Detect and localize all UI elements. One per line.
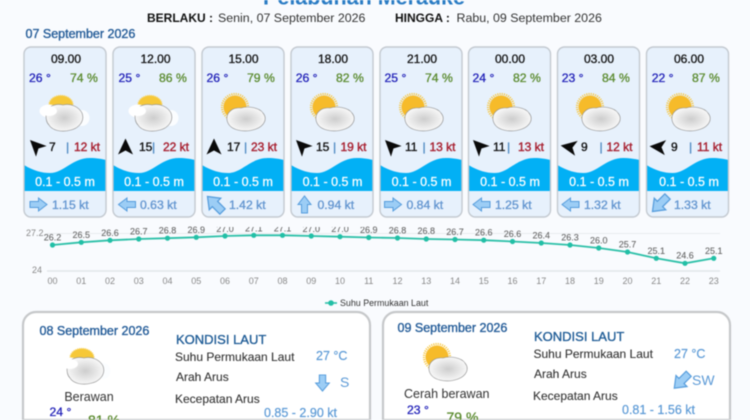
icon: partly cloudy <box>488 94 531 131</box>
forecast card 12.00: 0.63 kt <box>140 198 177 212</box>
sea conditions block: KONDISI LAUT <box>176 332 266 347</box>
forecast card 12.00: 25 ° <box>118 71 140 85</box>
forecast card 09.00 <box>24 47 106 217</box>
x axis labels: 05 <box>191 276 201 286</box>
panel: 08 September forecast: Berawan <box>64 390 114 404</box>
data labels: 26.7 <box>446 227 464 237</box>
forecast card 09.00: 26 ° <box>29 71 51 85</box>
x axis labels: 07 <box>249 276 259 286</box>
forecast card 00.00: 24 ° <box>472 71 494 85</box>
forecast card 18.00: 19 kt <box>340 140 367 154</box>
x axis labels: 02 <box>105 276 115 286</box>
forecast card 03.00: 12 kt <box>606 140 633 154</box>
x axis labels: 10 <box>335 276 345 286</box>
forecast card 21.00: 25 ° <box>384 71 406 85</box>
forecast card 09.00: | <box>66 140 69 154</box>
sea conditions block: 0.81 - 1.56 kt <box>622 403 695 417</box>
y axis labels: 24 <box>32 265 42 275</box>
forecast card 09.00: 74 % <box>70 71 98 85</box>
icon: cloudy <box>60 348 110 384</box>
forecast card 09.00: 0.1 - 0.5 m <box>35 175 95 189</box>
data labels: 27.1 <box>245 224 263 234</box>
icon: wind arrow <box>118 138 133 154</box>
x axis labels: 23 <box>709 276 719 286</box>
data labels: 27.0 <box>216 224 234 234</box>
forecast card 06.00: 0.1 - 0.5 m <box>659 175 719 189</box>
x axis labels: 06 <box>220 276 230 286</box>
x axis labels <box>47 276 719 286</box>
forecast card 03.00: 23 ° <box>562 71 584 85</box>
data labels: 25.1 <box>705 246 723 256</box>
sea conditions block: Arah Arus <box>176 370 229 384</box>
x axis labels: 17 <box>536 276 546 286</box>
x axis labels: 08 <box>277 276 288 286</box>
icon: partly cloudy <box>577 94 620 131</box>
x axis labels: 14 <box>450 276 460 286</box>
forecast card 06.00: | <box>689 140 692 154</box>
sea conditions block <box>533 329 715 417</box>
sea conditions block: Suhu Permukaan Laut <box>534 347 654 361</box>
forecast card 18.00: 0.94 kt <box>318 198 355 212</box>
icon: wind arrow <box>649 139 666 155</box>
icon: wind arrow <box>25 135 47 157</box>
forecast card 15.00 <box>202 47 284 217</box>
validity period header: HINGGA : <box>395 11 450 25</box>
data labels: 26.9 <box>187 225 205 235</box>
x axis labels: 03 <box>134 276 144 286</box>
forecast card 12.00: | <box>152 140 155 154</box>
x axis labels: 01 <box>76 276 86 286</box>
x axis labels: 20 <box>622 276 633 286</box>
sea conditions block: 27 °C <box>674 347 705 361</box>
forecast card 00.00: | <box>507 140 510 154</box>
sea conditions block: 0.85 - 2.90 kt <box>264 406 337 420</box>
x axis labels: 13 <box>421 276 431 286</box>
data labels: 26.2 <box>44 232 61 242</box>
icon: wind arrow <box>559 138 578 156</box>
forecast card 18.00: 15 <box>316 140 330 154</box>
forecast card 03.00: 0.1 - 0.5 m <box>569 175 629 189</box>
forecast card 06.00: 87 % <box>692 71 720 85</box>
forecast card 00.00: 00.00 <box>495 52 525 66</box>
icon: partly cloudy <box>424 344 467 381</box>
sea conditions block <box>175 332 349 420</box>
forecast card 03.00 <box>558 47 640 217</box>
forecast card 00.00: 13 kt <box>518 140 545 154</box>
forecast card 00.00: 11 <box>493 140 506 154</box>
icon: partly cloudy <box>667 94 710 131</box>
forecast card 15.00: 79 % <box>247 71 275 85</box>
forecast card 18.00 <box>291 47 373 217</box>
x axis labels: 21 <box>651 276 661 286</box>
sea conditions block: Kecepatan Arus <box>533 389 618 403</box>
sea conditions block: Suhu Permukaan Laut <box>175 350 295 364</box>
x axis labels: 11 <box>364 276 373 286</box>
forecast card 06.00: 11 kt <box>697 140 723 154</box>
temperature line <box>52 235 714 263</box>
data labels: 26.6 <box>475 228 493 238</box>
forecast card 15.00: 0.1 - 0.5 m <box>213 175 273 189</box>
x axis labels: 04 <box>162 276 173 286</box>
data labels: 25.7 <box>619 240 636 250</box>
x axis labels: 22 <box>680 276 690 286</box>
icon: current arrow south <box>316 375 329 391</box>
forecast card 00.00 <box>468 47 550 217</box>
forecast card 12.00: 22 kt <box>163 140 190 154</box>
y axis labels <box>26 228 44 275</box>
forecast card 21.00: 11 <box>405 140 418 154</box>
panel: 09 September forecast <box>383 312 730 420</box>
sea conditions block: 27 °C <box>316 349 347 363</box>
icon: current arrow <box>118 198 136 211</box>
forecast card 09.00: 09.00 <box>51 52 81 66</box>
icon: current arrow south-west <box>669 368 694 394</box>
panel: 08 September forecast <box>23 312 370 420</box>
icon: wind arrow <box>206 138 222 154</box>
data labels: 26.0 <box>590 236 608 246</box>
data labels: 26.9 <box>360 225 378 235</box>
data labels: 26.6 <box>504 229 521 239</box>
panel: 08 September forecast: 24 ° <box>50 405 71 419</box>
icon: wind arrow <box>291 135 313 157</box>
icon: current arrow <box>473 198 490 211</box>
forecast card 21.00: 21.00 <box>407 52 437 66</box>
forecast card 18.00: 0.1 - 0.5 m <box>303 175 362 189</box>
forecast card 18.00: 26 ° <box>296 71 318 85</box>
forecast card 21.00: | <box>422 140 426 154</box>
icon: partly cloudy <box>311 94 354 131</box>
icon: current arrow <box>298 196 311 213</box>
icon: partly cloudy <box>222 94 265 131</box>
validity period header: Rabu, 09 September 2026 <box>456 11 602 25</box>
data labels: 25.1 <box>647 246 665 256</box>
forecast card 15.00: 23 kt <box>251 140 278 154</box>
forecast card 15.00: 17 <box>227 140 241 154</box>
sea conditions block: S <box>340 374 349 390</box>
forecast card 21.00 <box>380 47 462 217</box>
x axis labels: 18 <box>565 276 575 286</box>
icon: wind arrow <box>380 135 402 157</box>
forecast card 03.00: 1.32 kt <box>584 198 621 212</box>
forecast card 03.00: 03.00 <box>584 52 614 66</box>
data labels <box>44 224 723 260</box>
icon: current arrow <box>647 191 673 217</box>
forecast card 03.00: 9 <box>581 140 588 154</box>
forecast card 06.00: 1.33 kt <box>674 198 711 212</box>
forecast card 21.00: 74 % <box>425 71 453 85</box>
line chart: sea surface temperature <box>26 219 723 308</box>
date heading: 07 September 2026 <box>26 27 135 41</box>
icon: current arrow <box>30 198 47 211</box>
data labels: 27.0 <box>331 224 349 234</box>
sea conditions block: Kecepatan Arus <box>175 392 260 406</box>
forecast card 00.00: 1.25 kt <box>495 198 532 212</box>
mask clipping the tops of the chart labels <box>215 219 365 227</box>
x axis labels: 16 <box>507 276 518 286</box>
forecast card 21.00: 13 kt <box>430 140 456 154</box>
validity period header: BERLAKU : <box>147 11 213 25</box>
panel: 09 September forecast: 23 ° <box>407 403 429 417</box>
icon: partly cloudy <box>400 94 443 131</box>
data labels: 24.6 <box>676 250 694 260</box>
x axis labels: 09 <box>306 276 316 286</box>
forecast card 00.00: 0.1 - 0.5 m <box>480 175 540 189</box>
legend: Suhu Permukaan Laut <box>340 298 429 308</box>
forecast card 06.00 <box>646 47 728 217</box>
forecast card 15.00: | <box>244 140 247 154</box>
forecast card 00.00: 82 % <box>513 71 541 85</box>
panel: 08 September forecast: 08 September 2026 <box>40 324 149 338</box>
x axis labels: 19 <box>594 276 604 286</box>
data labels: 26.8 <box>159 226 176 236</box>
data labels: 26.4 <box>532 230 550 240</box>
sea conditions block: KONDISI LAUT <box>534 329 624 344</box>
forecast card 06.00: 06.00 <box>674 52 704 66</box>
icon: current arrow <box>562 198 579 211</box>
data labels: 26.3 <box>561 232 579 242</box>
icon: cloudy <box>40 96 90 131</box>
y axis labels: 27.2 <box>26 228 44 238</box>
forecast card 12.00: 0.1 - 0.5 m <box>124 175 184 189</box>
validity period header: Senin, 07 September 2026 <box>218 11 366 25</box>
forecast card 03.00: | <box>600 140 603 154</box>
icon: cloudy <box>128 96 178 131</box>
forecast card 21.00: 0.1 - 0.5 m <box>392 175 451 189</box>
data labels: 26.6 <box>101 228 119 238</box>
icon: wind arrow <box>468 135 490 157</box>
data labels: 26.5 <box>72 230 90 240</box>
panel: 09 September forecast: 09 September 2026 <box>398 321 507 335</box>
x axis labels: 15 <box>479 276 489 286</box>
forecast card 15.00: 1.42 kt <box>229 198 266 212</box>
forecast card 06.00: 22 ° <box>652 71 674 85</box>
data labels: 27.1 <box>274 224 291 234</box>
icon: current arrow <box>202 191 228 217</box>
forecast card 12.00: 15 <box>139 140 153 154</box>
icon: current arrow <box>384 198 402 211</box>
forecast card 09.00: 1.15 kt <box>52 198 89 212</box>
sea conditions block: SW <box>692 372 715 388</box>
data labels: 26.8 <box>417 226 435 236</box>
forecast card 12.00 <box>113 47 195 217</box>
forecast card 09.00: 7 <box>49 140 56 154</box>
forecast card 15.00: 15.00 <box>228 52 259 66</box>
forecast card 09.00: 12 kt <box>74 140 101 154</box>
data labels: 26.7 <box>130 226 148 236</box>
forecast card 03.00: 84 % <box>602 71 630 85</box>
forecast card 18.00: 18.00 <box>318 52 348 66</box>
panel: 09 September forecast: Cerah berawan <box>404 387 490 401</box>
forecast card 06.00: 9 <box>671 140 678 154</box>
data labels: 26.8 <box>389 226 406 236</box>
data points <box>50 233 716 266</box>
forecast card 15.00: 26 ° <box>206 71 228 85</box>
forecast card 18.00: 82 % <box>336 71 364 85</box>
x axis labels: 12 <box>392 276 403 286</box>
forecast card 21.00: 0.84 kt <box>406 198 444 212</box>
x axis labels: 00 <box>47 276 58 286</box>
validity period header <box>147 11 602 25</box>
data labels: 27.0 <box>302 224 320 234</box>
forecast card 12.00: 12.00 <box>140 52 171 66</box>
forecast card 18.00: | <box>333 140 336 154</box>
sea conditions block: Arah Arus <box>534 367 587 381</box>
forecast card 12.00: 86 % <box>159 71 187 85</box>
